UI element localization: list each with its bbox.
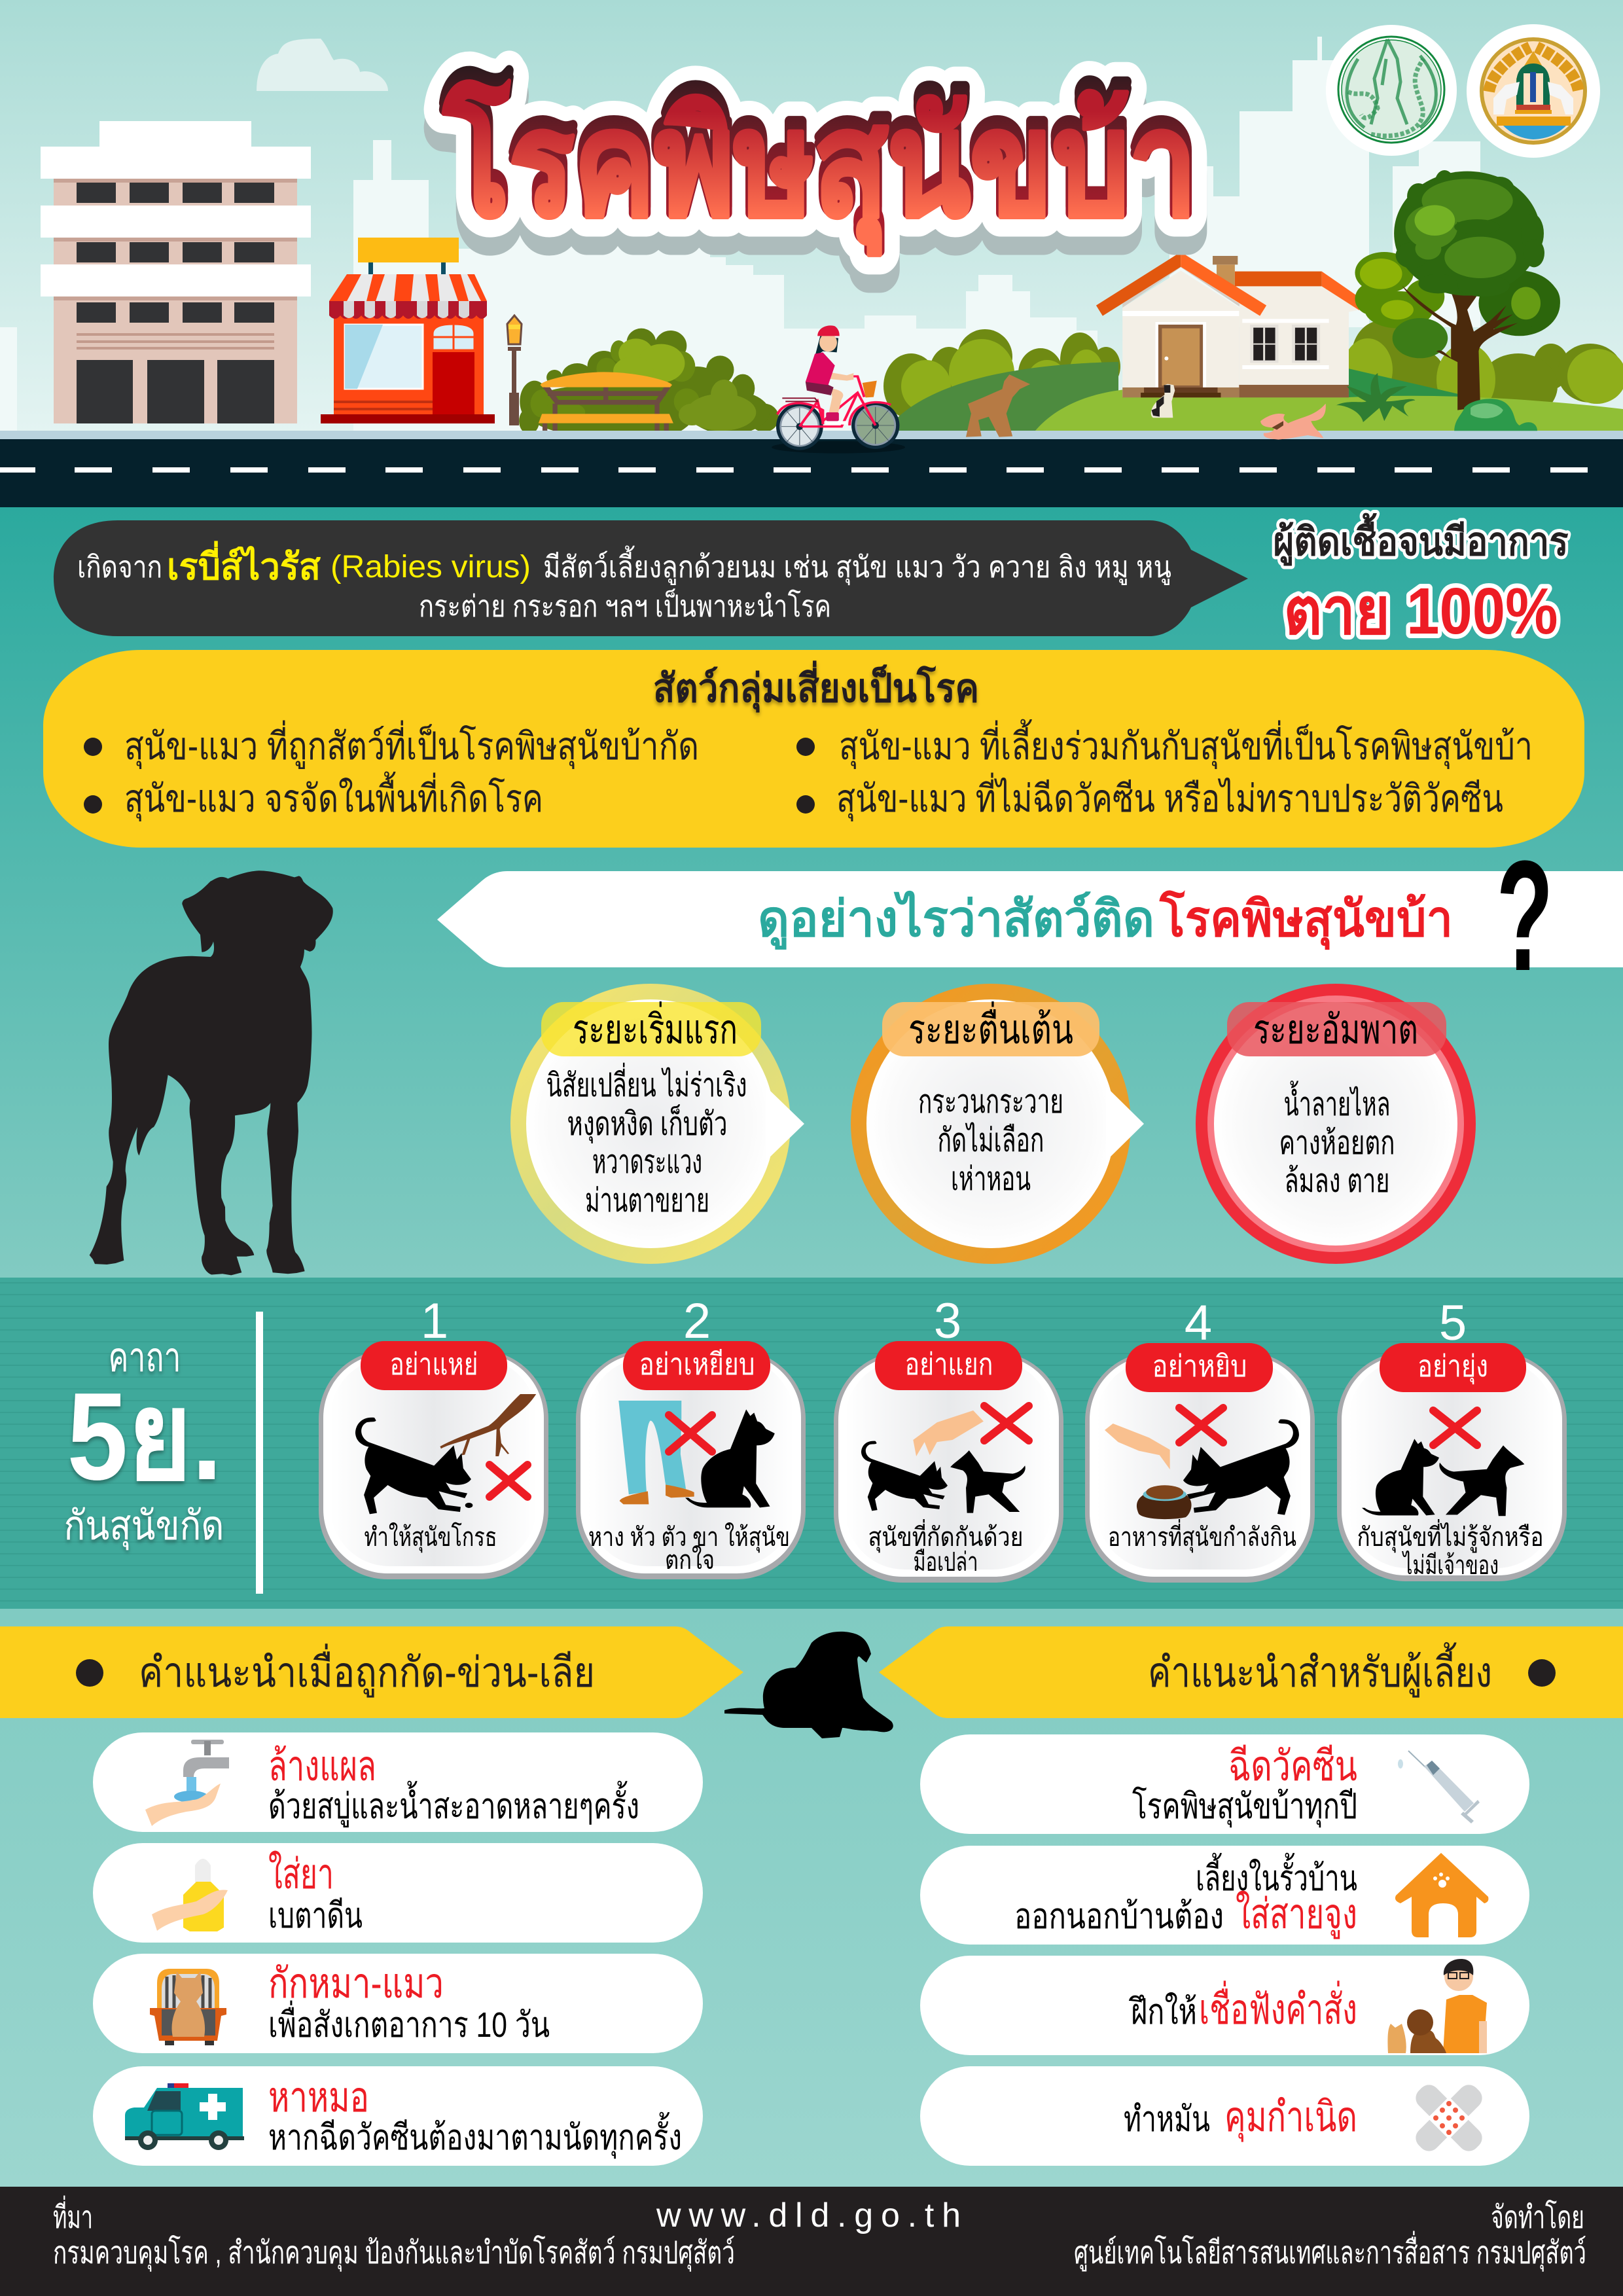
red x	[984, 1406, 1029, 1441]
stage label	[541, 1002, 761, 1056]
title: โรคพิษสุนัขบ้า	[443, 70, 1197, 245]
callout: fatality: ตาย 100%	[1284, 575, 1558, 648]
number: 1	[421, 1293, 448, 1349]
icon: contraceptive patch	[1412, 2081, 1486, 2155]
brown dog	[966, 374, 1030, 437]
hills and other bushes	[883, 321, 1623, 431]
heading: 5Y mantra: คาถา	[109, 1335, 181, 1380]
panel: cause of disease callout: (Rabies virus)	[330, 550, 531, 584]
sidewalk	[0, 431, 1623, 439]
panel: card 5 don't touch: อย่ายุ่ง	[1418, 1349, 1488, 1385]
panel: card 2 don't step	[576, 1293, 806, 1579]
callout: fatality: ผู้ติดเชื้อจนมีอาการ	[1274, 512, 1568, 566]
panel: stage 2 furious: กระวนกระวาย	[918, 1083, 1063, 1120]
panel: keep within fence: ออกนอกบ้านต้อง	[1014, 1897, 1224, 1936]
caption: หาง หัว ตัว ขา ให้สุนัข	[588, 1522, 790, 1553]
panel: stage 1 early: นิสัยเปลี่ยน ไม่ร่าเริง	[546, 1063, 747, 1103]
shop	[321, 238, 495, 423]
illustration	[861, 1410, 1026, 1513]
panel: stage 2 furious	[851, 984, 1144, 1264]
footer: ที่มา	[53, 2195, 93, 2235]
number: 2	[683, 1293, 711, 1349]
trunk and branches	[1402, 286, 1518, 410]
panel: stage 3 paralysis: ล้มลง ตาย	[1284, 1162, 1390, 1199]
panel: cause of disease callout: มีสัตว์เลี้ยงลูกด้วยนม เช่น สุนัข แมว วัว ควาย ลิง หมู หนู	[543, 545, 1171, 586]
panel: teal background	[0, 507, 1623, 1278]
road dashes	[0, 467, 1588, 473]
panel: how to tell banner: โรคพิษสุนัขบ้า	[1159, 889, 1453, 950]
panel: card 4 don't step near food	[1085, 1295, 1315, 1583]
caption: สุนัขที่กัดกันด้วย	[868, 1519, 1024, 1553]
panel: header sky and town scene	[0, 0, 1623, 507]
panel: apply medicine	[93, 1843, 703, 1943]
heading: 5Y mantra: กันสุนัขกัด	[64, 1503, 224, 1550]
caption: มือเปล่า	[914, 1548, 978, 1577]
badge	[1380, 1343, 1526, 1392]
red x	[1179, 1408, 1223, 1443]
panel: keep within fence: เลี้ยงในรั้วบ้าน	[1196, 1853, 1357, 1898]
main foliage	[1394, 170, 1544, 296]
panel: how to tell banner: ดูอย่างไรว่าสัตว์ติด	[758, 890, 1154, 950]
logo: first department seal	[1326, 25, 1457, 156]
panel: see doctor: หาหมอ	[268, 2073, 369, 2121]
street lamp	[507, 315, 522, 425]
caption	[868, 1519, 1024, 1577]
footer: กรมควบคุมโรค , สำนักควบคุม ป้องกันและบำบัดโรคสัตว์ กรมปศุสัตว์	[53, 2234, 735, 2272]
banner: advice for owners: คำแนะนำสำหรับผู้เลี้ยง	[1148, 1642, 1492, 1698]
tree	[1355, 170, 1560, 410]
number: 5	[1439, 1295, 1467, 1351]
banner: advice when bitten: คำแนะนำเมื่อถูกกัด-ข่วน-เลีย	[139, 1643, 595, 1698]
panel: at-risk animals	[43, 650, 1584, 848]
panel: stage 2 furious: กัดไม่เลือก	[937, 1122, 1044, 1158]
building	[41, 121, 311, 423]
icon: dog house	[1395, 1853, 1488, 1937]
panel: stage 2 furious: ระยะตื่นเต้น	[908, 1001, 1073, 1052]
title: โรคพิษสุนัขบ้า	[443, 77, 1197, 251]
panel: wash wound: ล้างแผล	[268, 1742, 376, 1789]
background city skyline	[0, 37, 1480, 432]
panel: vaccinate	[920, 1734, 1529, 1834]
illustration	[1362, 1439, 1524, 1516]
footer: จัดทำโดย	[1491, 2199, 1584, 2235]
panel: sterilize: ทำหมัน	[1124, 2100, 1210, 2139]
title: โรคพิษสุนัขบ้า	[443, 81, 1197, 255]
panel: apply medicine: เบตาดีน	[268, 1896, 363, 1935]
panel: stage 3 paralysis	[1196, 984, 1476, 1264]
badge	[361, 1341, 507, 1390]
panel: vaccinate: ฉีดวัคซีน	[1228, 1742, 1357, 1789]
panel: stage 3 paralysis: ระยะอัมพาต	[1253, 1007, 1418, 1052]
bullet list	[84, 719, 1533, 822]
caption: ทำให้สุนัขโกรธ	[364, 1522, 497, 1553]
left light foliage	[1355, 252, 1444, 329]
cloud	[257, 39, 388, 91]
icon: betadine bottle and hand	[152, 1859, 228, 1931]
panel: sterilize: คุมกำเนิด	[1224, 2093, 1357, 2142]
panel: stage 3 paralysis: น้ำลายไหล	[1284, 1081, 1390, 1122]
heading: สัตว์กลุ่มเสี่ยงเป็นโรค	[653, 660, 979, 713]
icon: syringe	[1398, 1751, 1480, 1823]
cyclist with bicycle	[772, 325, 905, 454]
stage label	[1227, 1002, 1446, 1056]
heading: 5Y mantra	[64, 1335, 224, 1550]
bullet list: สุนัข-แมว ที่ไม่ฉีดวัคซีน หรือไม่ทราบประวัติวัคซีน	[836, 772, 1503, 822]
icon: owner with pets	[1387, 1959, 1487, 2053]
banner: advice for owners	[879, 1626, 1623, 1718]
panel: card 1 don't provoke: อย่าแหย่	[390, 1347, 478, 1381]
icon: faucet and hand	[145, 1740, 229, 1826]
panel: card 5 don't touch	[1337, 1295, 1567, 1581]
caption	[588, 1522, 790, 1575]
lower foliage	[1393, 318, 1448, 358]
panel: stage 1 early: ม่านตาขยาย	[585, 1182, 709, 1219]
illustration	[618, 1401, 775, 1507]
panel: cause of disease callout	[54, 520, 1248, 636]
illustration	[1105, 1420, 1299, 1519]
panel: how to tell banner	[437, 828, 1623, 1003]
red x	[490, 1465, 527, 1497]
arrow	[766, 1086, 804, 1161]
house	[1096, 252, 1361, 397]
panel: cause of disease callout: กระต่าย กระรอก ฯลฯ เป็นพาหะนำโรค	[419, 588, 831, 623]
icon: ambulance	[125, 2083, 244, 2150]
icon: pet carrier	[150, 1969, 226, 2045]
panel: stage 1 early: ระยะเริ่มแรก	[573, 1001, 738, 1052]
panel: card 3 don't separate: อย่าแยก	[904, 1347, 993, 1381]
illustration	[355, 1394, 536, 1514]
panel: wash wound	[93, 1732, 703, 1832]
panel: see doctor	[93, 2066, 703, 2166]
bushes behind bench	[519, 329, 779, 440]
road	[0, 439, 1623, 507]
cloud behind title	[1008, 105, 1086, 164]
running puppy	[1260, 404, 1326, 440]
icon: lying dog silhouette	[724, 1632, 893, 1738]
panel: confine animal: เพื่อสังเกตอาการ 10 วัน	[268, 2000, 550, 2045]
panel: keep within fence: ใส่สายจูง	[1236, 1890, 1357, 1939]
panel: confine animal	[93, 1954, 703, 2053]
panel: cause of disease callout: เรบี่ส์ไวรัส	[167, 541, 321, 587]
badge	[1126, 1343, 1273, 1392]
heading: 5Y mantra: 5ย.	[67, 1367, 223, 1506]
panel: card 1 don't provoke	[319, 1293, 548, 1579]
panel: stage 1 early	[510, 984, 804, 1264]
badge	[623, 1341, 770, 1390]
caption: ไม่มีเจ้าของ	[1402, 1551, 1499, 1580]
title	[443, 70, 1197, 270]
title: โรคพิษสุนัขบ้า	[443, 95, 1197, 270]
stage label	[882, 1002, 1099, 1056]
panel: stage 1 early: หงุดหงิด เก็บตัว	[567, 1104, 728, 1143]
panel: stage 2 furious: เห่าหอน	[951, 1160, 1031, 1197]
panel: train to obey: ฝึกให้	[1129, 1992, 1197, 2032]
red x	[1433, 1410, 1477, 1445]
caption: ตกใจ	[665, 1545, 715, 1575]
panel: 5 don'ts striped band	[0, 1278, 1623, 1609]
panel: card 2 don't step: อย่าเหยียบ	[639, 1347, 755, 1381]
panel: wash wound: ด้วยสบู่และน้ำสะอาดหลายๆครั้ง	[268, 1781, 639, 1827]
panel: cause of disease callout: เกิดจาก	[77, 550, 162, 584]
red x	[669, 1415, 712, 1452]
panel: see doctor: หากฉีดวัคซีนต้องมาตามนัดทุกครั้ง	[268, 2112, 682, 2159]
panel: lower background	[0, 1609, 1623, 2187]
title: โรคพิษสุนัขบ้า	[443, 70, 1197, 245]
cat	[1151, 384, 1175, 418]
badge	[875, 1341, 1022, 1390]
panel: vaccinate: โรคพิษสุนัขบ้าทุกปี	[1132, 1786, 1357, 1828]
number: 4	[1185, 1295, 1212, 1351]
panel: sterilize	[920, 2066, 1529, 2166]
panel: card 3 don't separate	[834, 1293, 1063, 1583]
panel: card 4 don't step near food: อย่าหยิบ	[1152, 1349, 1247, 1383]
caption: กับสุนัขที่ไม่รู้จักหรือ	[1357, 1519, 1543, 1553]
footer	[0, 2187, 1623, 2296]
plant and bush	[1336, 373, 1537, 431]
bench	[539, 372, 673, 431]
panel: keep within fence	[920, 1846, 1529, 1945]
panel: stage 3 paralysis: คางห้อยตก	[1279, 1124, 1395, 1161]
panel: apply medicine: ใส่ยา	[268, 1850, 334, 1897]
panel: train to obey: เชื่อฟังคำสั่ง	[1199, 1981, 1357, 2033]
panel: stage 1 early: หวาดระแวง	[592, 1143, 702, 1180]
banner: advice when bitten	[0, 1626, 743, 1718]
panel: train to obey	[920, 1956, 1529, 2055]
footer: www.dld.go.th	[656, 2197, 961, 2234]
bullet list: สุนัข-แมว ที่ถูกสัตว์ที่เป็นโรคพิษสุนัขบ้ากัด	[124, 720, 699, 770]
panel: confine animal: กักหมา-แมว	[268, 1960, 444, 2007]
number: 3	[934, 1293, 961, 1349]
caption	[1357, 1519, 1543, 1580]
logo: second department seal	[1467, 24, 1600, 158]
icon: big dog silhouette	[90, 870, 333, 1275]
caption: อาหารที่สุนัขกำลังกิน	[1108, 1519, 1296, 1553]
question mark: ?	[1496, 828, 1554, 1003]
bullet list: สุนัข-แมว จรจัดในพื้นที่เกิดโรค	[124, 772, 543, 822]
callout: fatality	[1274, 512, 1568, 648]
arrow	[1106, 1086, 1144, 1161]
right foliage	[1478, 270, 1560, 336]
title: โรคพิษสุนัขบ้า	[443, 77, 1197, 251]
divider	[256, 1312, 263, 1594]
